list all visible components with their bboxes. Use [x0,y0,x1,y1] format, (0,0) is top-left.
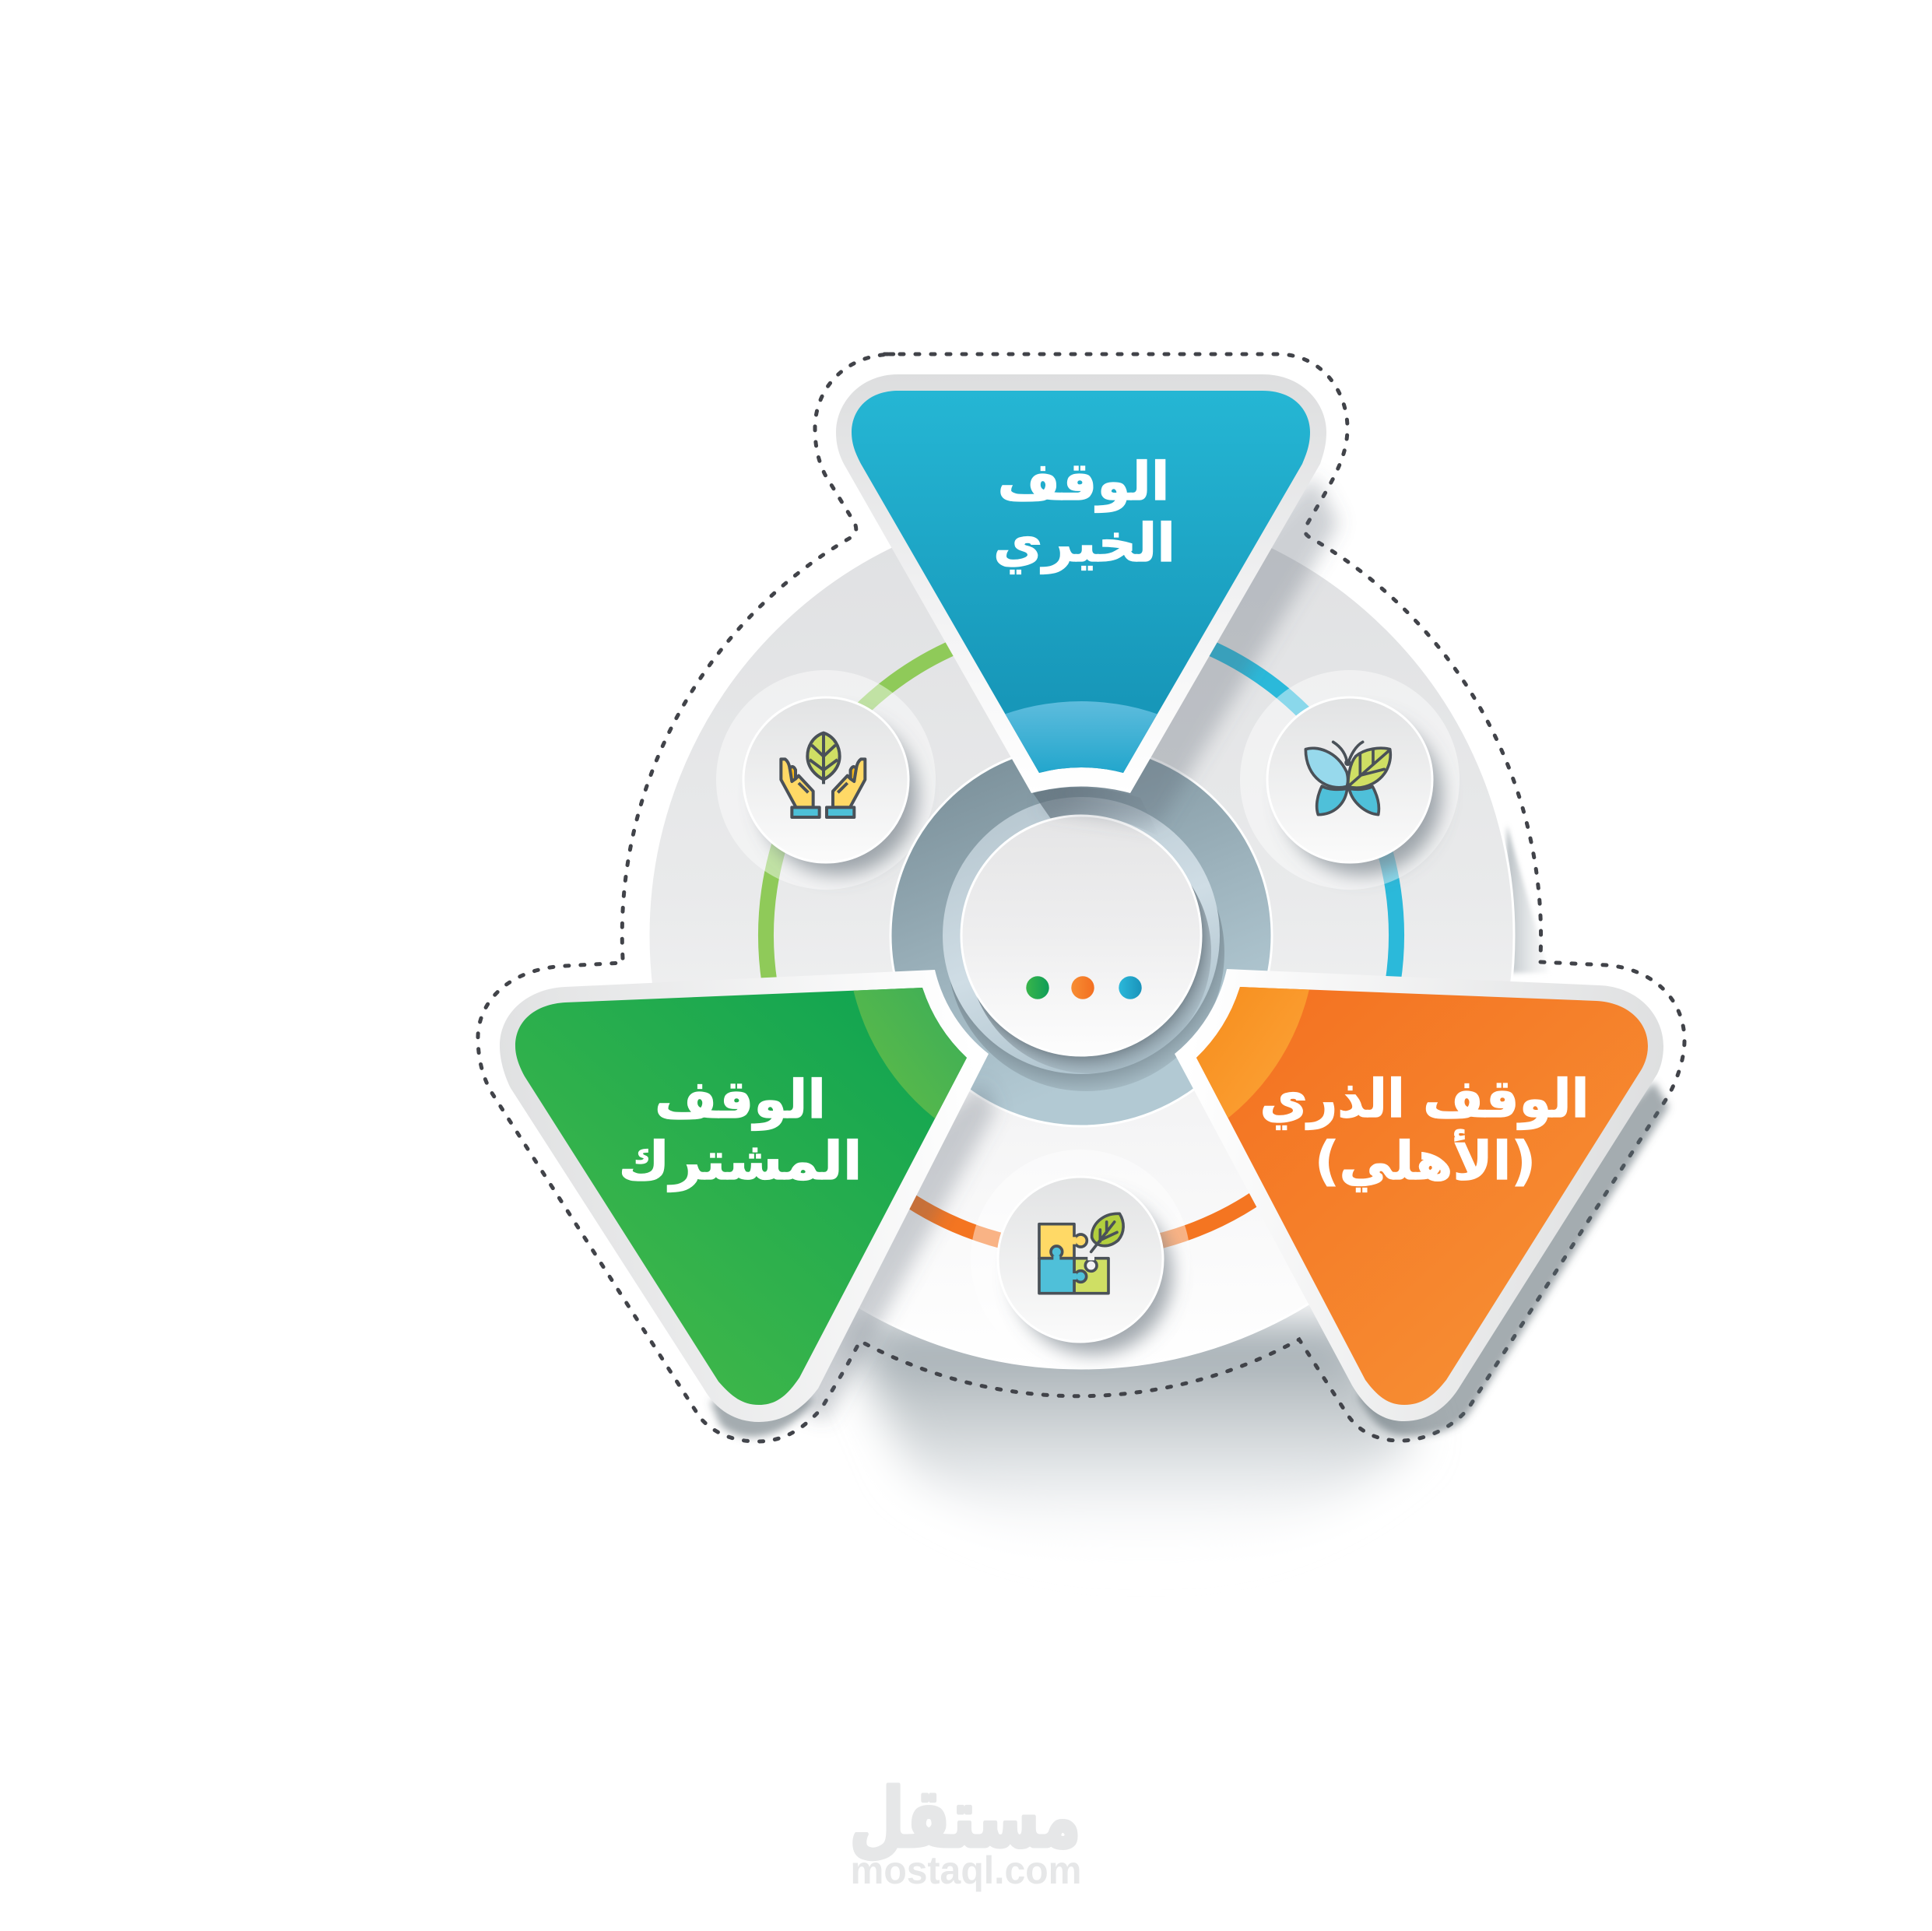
heading: orange: (الأهلي) [1315,1129,1536,1192]
panel: blue triangle [836,374,1326,793]
heading: green: المشترك [618,1131,862,1192]
arc: orange [872,1171,1291,1251]
triangle shadows [710,476,1669,1437]
icon: puzzle leaf [1039,1213,1123,1294]
panel: icon circles [743,697,1442,1354]
arc: cyan [1081,620,1396,982]
centre circle [961,816,1201,1055]
main disc [648,503,1514,1368]
heading: blue: الوقف [998,451,1169,513]
watermark: mostaql logo: mostaql.com [850,1848,1082,1892]
halos [716,670,1460,1369]
icon: hands holding leaf [781,733,865,817]
middle ring [943,797,1220,1074]
icon: butterfly leaf [1305,742,1390,815]
heading: blue: الخيري [993,513,1175,574]
arc: green [766,620,1081,982]
dark outer ring [890,745,1272,1126]
heading: orange: الوقف الذري [1259,1069,1590,1130]
dashed outline [478,354,1684,1441]
panel: green triangle [500,970,989,1422]
three dots [1026,976,1142,999]
panel: orange triangle [1175,969,1663,1421]
ring arcs [766,620,1396,1251]
infographic [476,352,1686,1891]
watermark: mostaql logo: مستقل [850,1771,1080,1866]
panel: central hub [890,745,1272,1126]
watermark: mostaql logo [850,1771,1082,1892]
heading: green: الوقف [655,1069,826,1131]
disc drop shadow [845,825,1549,1557]
